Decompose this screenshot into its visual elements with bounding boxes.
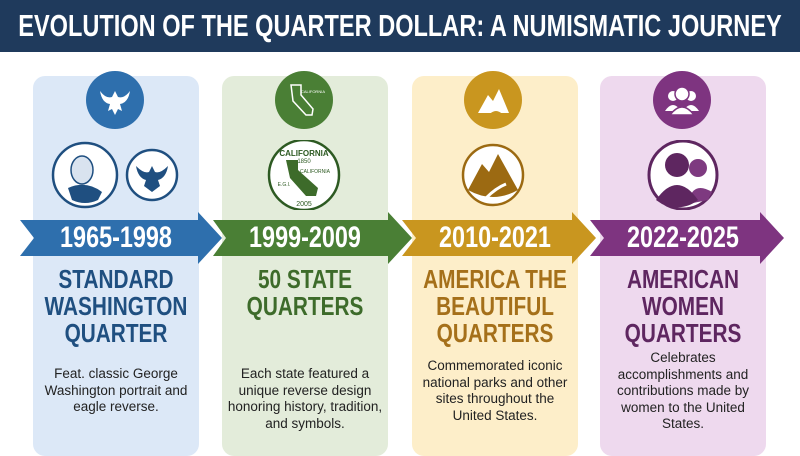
coins xyxy=(52,140,718,210)
text: AMERICAN xyxy=(627,264,739,294)
text: 2010-2021 xyxy=(439,221,551,254)
panel: 1999-2009 xyxy=(222,76,388,456)
text: WASHINGTON xyxy=(45,291,187,321)
text: 1999-2009 xyxy=(249,221,361,254)
panel: 2010-2021 xyxy=(412,76,578,456)
coin: california xyxy=(269,140,339,210)
descriptions: Feat. classic George Washington portrait and eagle reverse. xyxy=(45,366,187,414)
text: BEAUTIFUL xyxy=(436,291,554,321)
panel: 2022-2025 xyxy=(600,76,766,456)
arrows xyxy=(20,212,784,264)
title xyxy=(0,0,800,52)
text: STANDARD xyxy=(58,264,174,294)
coin: women xyxy=(649,141,717,209)
headings xyxy=(44,264,187,348)
year labels: 1965-1998 xyxy=(60,221,172,254)
icon: mountains xyxy=(464,71,522,129)
text: WOMEN xyxy=(642,291,724,321)
text: Commemorated iconic national parks and other sites throughout the United States. xyxy=(423,358,567,422)
coin: california: E.G.I. xyxy=(278,182,290,188)
coin: washington xyxy=(53,143,117,207)
icon: people xyxy=(653,71,711,129)
text: QUARTERS xyxy=(625,318,741,348)
coin: california: 1850 xyxy=(297,159,311,165)
icon: eagle xyxy=(86,71,144,129)
icon: state map xyxy=(275,71,333,129)
text: Each state featured a unique reverse design honoring history, tradition, and symbols. xyxy=(228,366,382,430)
icon: state map: CALIFORNIA xyxy=(301,89,325,94)
title: EVOLUTION OF THE QUARTER DOLLAR: A NUMISMATIC JOURNEY xyxy=(18,8,782,43)
coin: california: CALIFORNIA xyxy=(300,169,331,175)
text: AMERICA THE xyxy=(423,264,567,294)
text: QUARTER xyxy=(65,318,167,348)
coin: mountains xyxy=(463,145,523,205)
coin: eagle xyxy=(127,150,177,200)
text: QUARTERS xyxy=(247,291,363,321)
text: 50 STATE xyxy=(258,264,352,294)
coin: california: 2005 xyxy=(296,201,312,208)
text: Celebrates accomplishments and contributions made by women to the United States. xyxy=(617,350,749,431)
text: QUARTERS xyxy=(437,318,553,348)
coin: california: CALIFORNIA xyxy=(279,149,329,158)
text: 2022-2025 xyxy=(627,221,739,254)
panel: 1965-1998 xyxy=(33,76,199,456)
